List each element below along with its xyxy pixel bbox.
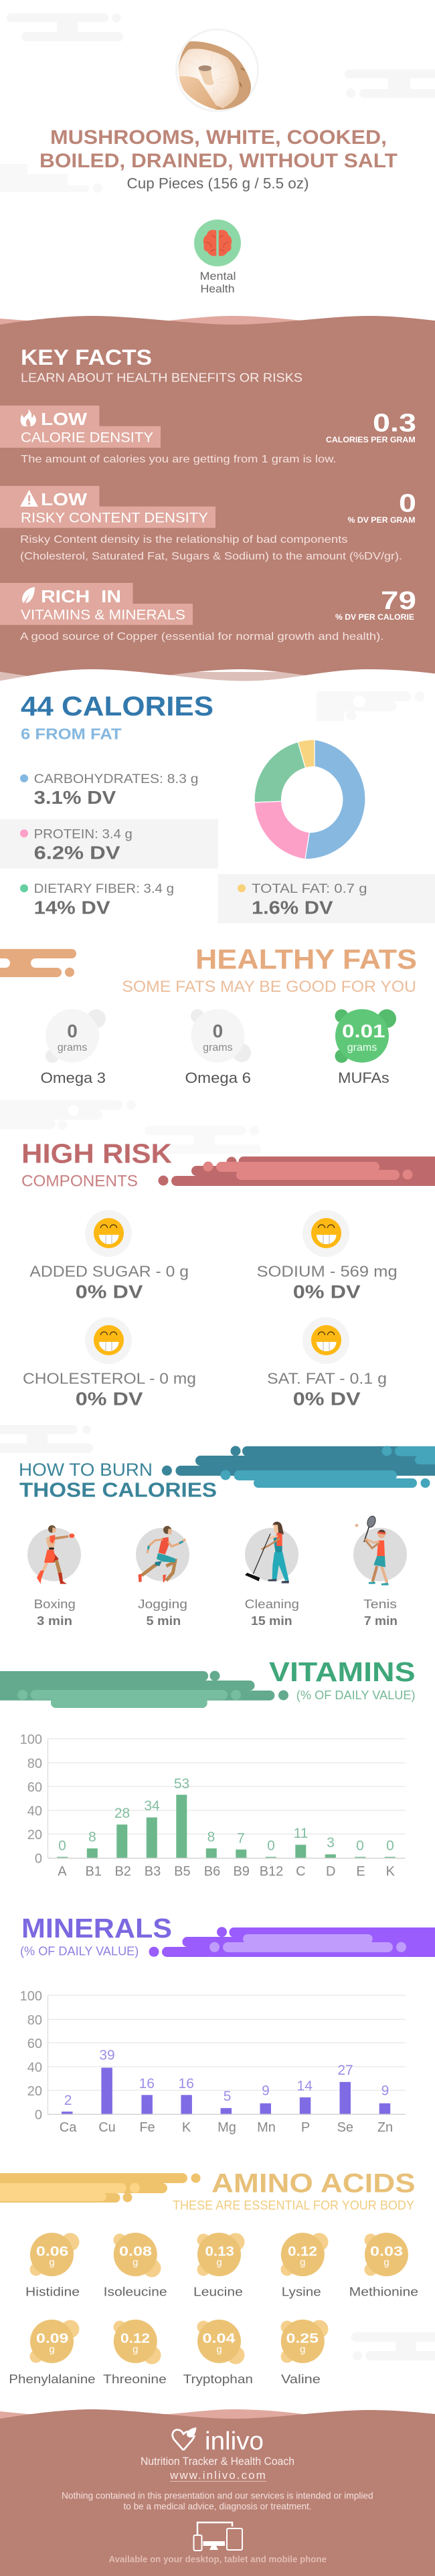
icon: devices [194, 2522, 242, 2551]
fact: low calorie density: The amount of calories you are getting from 1 gram is low. [21, 454, 336, 465]
bar chart: vitamins: 0 [35, 1851, 42, 1866]
label: mental health [199, 270, 236, 295]
bar chart: minerals: 100 [20, 1989, 42, 2004]
item: sodium [257, 1210, 398, 1302]
amino: methionine [349, 2233, 418, 2299]
amino: isoleucine: 0.08 [119, 2244, 152, 2259]
bar chart: minerals: 16 [179, 2076, 194, 2091]
bar chart: vitamins: 3 [327, 1835, 335, 1851]
amino: isoleucine: g [133, 2257, 138, 2268]
amino: threonine: g [133, 2344, 138, 2355]
fat: omega 3: Omega 3 [40, 1069, 106, 1086]
heading: how to burn: HOW TO BURN [19, 1460, 153, 1480]
panel: minerals [20, 1913, 435, 2135]
bar chart: vitamins: 20 [27, 1828, 42, 1842]
panel: key facts [0, 316, 435, 681]
row: dietary fiber [20, 881, 174, 918]
heading: minerals: MINERALS [21, 1913, 172, 1944]
bar chart: vitamins: 0 [356, 1838, 364, 1854]
item: added sugar [29, 1210, 189, 1302]
bar chart: vitamins: B3 [145, 1865, 161, 1879]
fact: rich in vitamins and minerals: RICH IN [41, 586, 121, 606]
item: saturated fat: SAT. FAT - 0.1 g [267, 1370, 387, 1387]
decorative banner: vitamins [0, 1670, 288, 1708]
bar chart: vitamins: 7 [237, 1831, 245, 1846]
fact: rich in vitamins and minerals [0, 583, 416, 642]
fat: omega 3: grams [58, 1042, 87, 1053]
item: cholesterol [23, 1317, 196, 1409]
fact: low risky content density: RISKY CONTENT DENSITY [21, 510, 208, 526]
amino: leucine: 0.13 [205, 2244, 234, 2259]
amino: threonine [103, 2320, 167, 2386]
row: total fat [218, 874, 435, 924]
row: carbohydrates: CARBOHYDRATES: 8.3 g [34, 772, 198, 786]
fat: MUFAs: grams [347, 1042, 377, 1053]
icon: brain, mental health [194, 220, 241, 266]
bar chart: minerals: 0 [35, 2108, 42, 2123]
bar chart: vitamins: B5 [174, 1865, 191, 1879]
amino: valine: Valine [281, 2373, 321, 2386]
fact: rich in vitamins and minerals: 79 [381, 587, 416, 615]
heading: amino acids: AMINO ACIDS [211, 2168, 416, 2198]
bar chart: vitamins: 53 [174, 1776, 189, 1792]
heading: key facts: KEY FACTS [21, 345, 152, 369]
amino: lysine [281, 2233, 328, 2299]
bar chart: vitamins: B1 [85, 1865, 102, 1879]
decorative banner: burn [162, 1446, 435, 1488]
fat: omega 3 [40, 1009, 106, 1086]
amino: tryptophan: Tryptophan [183, 2373, 253, 2386]
activity: boxing: 3 min [37, 1614, 72, 1628]
bar chart: vitamins: 11 [294, 1826, 308, 1841]
donut chart: calories [254, 740, 365, 859]
bar chart: vitamins: B9 [233, 1865, 250, 1879]
fact: low calorie density: CALORIE DENSITY [21, 430, 153, 446]
food image: mushroom [177, 29, 258, 111]
activity: jogging: 5 min [146, 1614, 181, 1628]
fact: rich in vitamins and minerals: % DV PER CALORIE [335, 612, 414, 622]
decorative cloud: top right [345, 70, 435, 98]
fact: low calorie density [0, 406, 416, 465]
fact: low calorie density: 0.3 [373, 409, 416, 437]
bar chart: vitamins: B12 [260, 1865, 283, 1879]
bar chart: minerals: 14 [297, 2078, 313, 2093]
decorative cloud: left of title [0, 164, 102, 193]
activity: cleaning: 15 min [251, 1614, 292, 1628]
activity: cleaning: Cleaning [245, 1598, 299, 1611]
bar chart: vitamins: 40 [27, 1804, 42, 1819]
footer availability note: Available on your desktop, tablet and mobile phone [108, 2554, 327, 2565]
activity: tennis [353, 1515, 407, 1628]
amino: histidine: 0.06 [36, 2244, 68, 2259]
bar chart: vitamins [20, 1732, 406, 1879]
amino: methionine: 0.03 [370, 2244, 403, 2259]
amino: valine: g [300, 2344, 305, 2355]
title: BOILED, DRAINED, WITHOUT SALT [39, 150, 398, 172]
row: protein: 6.2% DV [34, 842, 120, 863]
fact: low risky content density [0, 486, 416, 562]
subheading: percent of daily value: (% OF DAILY VALUE) [20, 1944, 139, 1958]
label: mental health: Mental [199, 270, 236, 282]
fat: omega 6: grams [203, 1042, 233, 1053]
fat: omega 6 [185, 1009, 251, 1086]
decorative banner: amino acids [0, 2173, 201, 2203]
decorative cloud: top left [7, 13, 123, 41]
decorative cloud: amino acids right [351, 2332, 435, 2360]
amino: tryptophan: g [216, 2344, 222, 2355]
amino: histidine [25, 2233, 80, 2299]
amino: tryptophan: 0.04 [202, 2331, 236, 2346]
amino: threonine: 0.12 [120, 2331, 150, 2346]
bar chart: vitamins: B6 [204, 1865, 220, 1879]
heading: calories: 44 CALORIES [21, 691, 213, 721]
subheading: percent of daily value: (% OF DAILY VALUE) [296, 1688, 416, 1702]
fact: low calorie density: LOW [41, 409, 88, 429]
amino: lysine: Lysine [282, 2286, 321, 2299]
bar chart: minerals: 27 [337, 2063, 353, 2078]
activity: boxing [27, 1525, 81, 1628]
label: mental health: Health [201, 282, 234, 295]
decorative banner: minerals [149, 1927, 435, 1957]
amino: leucine [193, 2233, 245, 2299]
panel: footer [0, 2409, 435, 2576]
row: dietary fiber: DIETARY FIBER: 3.4 g [34, 881, 174, 896]
activity: cleaning [245, 1522, 299, 1628]
footer tagline: Nutrition Tracker & Health Coach [141, 2455, 294, 2468]
amino: phenylalanine [9, 2320, 96, 2386]
amino: lysine: 0.12 [288, 2244, 317, 2259]
heading: those calories: THOSE CALORIES [19, 1479, 217, 1502]
item: cholesterol: CHOLESTEROL - 0 mg [23, 1370, 196, 1387]
row: total fat: 1.6% DV [252, 897, 333, 918]
bar chart: vitamins: A [58, 1865, 67, 1879]
heading: high risk: HIGH RISK [21, 1138, 172, 1169]
subheading: components: COMPONENTS [21, 1172, 138, 1190]
panel: healthy fats [0, 944, 417, 1086]
fact: low risky content density: LOW [41, 489, 88, 509]
footer disclaimer: to be a medical advice, diagnosis or treatment. [123, 2500, 312, 2511]
bar chart: minerals: 60 [27, 2037, 42, 2051]
bar chart: minerals: Cu [98, 2120, 116, 2135]
amino: histidine: Histidine [25, 2286, 80, 2299]
bar chart: minerals: Mn [257, 2120, 276, 2135]
item: added sugar: ADDED SUGAR - 0 g [29, 1263, 189, 1280]
decorative banner: high risk [158, 1156, 435, 1186]
fact: low calorie density: CALORIES PER GRAM [326, 435, 416, 444]
bar chart: minerals: 2 [64, 2093, 72, 2108]
footer url: www.inlivo.com [169, 2469, 266, 2482]
title [39, 126, 398, 172]
amino: leucine: g [216, 2257, 222, 2268]
amino: isoleucine [104, 2233, 167, 2299]
row: total fat: TOTAL FAT: 0.7 g [252, 881, 367, 896]
bar chart: vitamins: 28 [114, 1806, 130, 1821]
subheading: calories from fat: 6 FROM FAT [21, 725, 122, 742]
bar chart: minerals: Fe [139, 2120, 155, 2135]
decorative banner: healthy fats [0, 949, 76, 977]
fact: rich in vitamins and minerals: A good source of Copper (essential for normal growth and health). [20, 631, 384, 642]
bar chart: vitamins: E [356, 1865, 365, 1879]
bar chart: minerals: 9 [262, 2083, 270, 2099]
activity: boxing: Boxing [34, 1598, 76, 1611]
amino: leucine: Leucine [193, 2286, 243, 2299]
fat: omega 6: Omega 6 [185, 1069, 251, 1086]
subheading: key facts: LEARN ABOUT HEALTH BENEFITS OR RISKS [21, 371, 302, 384]
item: sodium: SODIUM - 569 mg [257, 1263, 398, 1280]
row: dietary fiber: 14% DV [34, 897, 110, 918]
bar chart: minerals [20, 1989, 406, 2135]
bar chart: vitamins: 0 [58, 1838, 66, 1854]
amino: methionine: g [383, 2257, 389, 2268]
bar chart: minerals: 80 [27, 2013, 42, 2028]
logo: inlivo: inlivo [205, 2427, 264, 2456]
fat: MUFAs [335, 1009, 396, 1086]
activity: jogging [136, 1526, 189, 1628]
amino: isoleucine: Isoleucine [104, 2286, 167, 2299]
decorative cloud: calories [317, 691, 424, 721]
footer disclaimer [62, 2490, 373, 2511]
bar chart: vitamins: D [326, 1865, 335, 1879]
row: carbohydrates: 3.1% DV [34, 787, 116, 808]
bar chart: vitamins: C [296, 1865, 306, 1879]
bar chart: vitamins: 0 [267, 1838, 275, 1854]
amino: lysine: g [300, 2257, 305, 2268]
fact: low risky content density: % DV PER GRAM [348, 515, 415, 525]
bar chart: minerals: Mg [217, 2120, 236, 2135]
serving size: Cup Pieces (156 g / 5.5 oz) [127, 175, 309, 191]
subheading: healthy fats: SOME FATS MAY BE GOOD FOR YOU [122, 978, 416, 996]
amino: phenylalanine: Phenylalanine [9, 2373, 96, 2386]
bar chart: minerals: Se [337, 2120, 353, 2135]
decorative cloud: above high risk left [0, 1100, 136, 1130]
amino: valine [281, 2320, 328, 2386]
title: MUSHROOMS, WHITE, COOKED, [50, 126, 387, 149]
heading: healthy fats: HEALTHY FATS [195, 944, 417, 975]
bar chart: vitamins: 80 [27, 1756, 42, 1771]
bar chart: vitamins: B2 [114, 1865, 131, 1879]
amino: phenylalanine: 0.09 [36, 2331, 68, 2346]
bar chart: minerals: Zn [377, 2120, 393, 2135]
item: added sugar: 0% DV [76, 1281, 143, 1302]
amino: threonine: Threonine [103, 2373, 167, 2386]
bar chart: minerals: P [301, 2120, 310, 2135]
fat: omega 3: 0 [67, 1021, 78, 1041]
bar chart: minerals: Ca [60, 2120, 77, 2135]
item: sodium: 0% DV [293, 1281, 361, 1302]
item: saturated fat [267, 1317, 387, 1409]
heading: vitamins: VITAMINS [269, 1656, 416, 1687]
bar chart: minerals: 40 [27, 2060, 42, 2075]
bar chart: vitamins: 34 [144, 1798, 160, 1814]
bar chart: vitamins: 60 [27, 1780, 42, 1795]
row: carbohydrates [20, 772, 198, 808]
footer disclaimer: Nothing contained in this presentation and our services is intended or implied [62, 2490, 373, 2500]
bar chart: vitamins: 8 [88, 1830, 96, 1844]
activity: jogging: Jogging [138, 1598, 187, 1611]
fat: MUFAs: 0.01 [342, 1021, 385, 1041]
amino: valine: 0.25 [286, 2331, 319, 2346]
bar chart: minerals: 39 [99, 2048, 115, 2063]
fat: MUFAs: MUFAs [338, 1069, 389, 1086]
bar chart: minerals: 16 [139, 2076, 155, 2091]
panel: how to burn those calories [19, 1446, 435, 1628]
fact: low risky content density: Risky Content density is the relationship of bad components [20, 534, 348, 545]
amino: histidine: g [49, 2257, 55, 2268]
bar chart: minerals: K [182, 2120, 191, 2135]
bar chart: vitamins: 100 [20, 1732, 42, 1747]
bar chart: minerals: 5 [224, 2089, 231, 2104]
item: cholesterol: 0% DV [76, 1388, 143, 1409]
fact: low risky content density: 0 [399, 489, 416, 517]
fat: omega 6: 0 [213, 1021, 223, 1041]
item: saturated fat: 0% DV [293, 1388, 361, 1409]
bar chart: vitamins: K [386, 1865, 396, 1879]
logo: inlivo [173, 2427, 264, 2456]
panel: high risk components [21, 1138, 435, 1409]
bar chart: vitamins: 8 [207, 1830, 215, 1844]
row: protein [0, 819, 218, 869]
fact: low risky content density: (Cholesterol, Saturated Fat, Sugars & Sodium) to the amount (%DV/gr). [20, 551, 402, 562]
decorative cloud: above burn [0, 1425, 93, 1453]
bar chart: minerals: 9 [381, 2083, 389, 2099]
bar chart: minerals: 20 [27, 2084, 42, 2099]
amino: phenylalanine: g [49, 2344, 55, 2355]
fact: rich in vitamins and minerals: VITAMINS & MINERALS [21, 606, 185, 622]
panel: vitamins [0, 1656, 416, 1879]
bar chart: vitamins: 0 [386, 1838, 394, 1854]
activity: tennis: 7 min [364, 1614, 398, 1628]
row: protein: PROTEIN: 3.4 g [34, 827, 133, 841]
amino: tryptophan [183, 2320, 253, 2386]
panel: amino acids [0, 2168, 418, 2386]
subheading: amino acids: THESE ARE ESSENTIAL FOR YOUR BODY [173, 2198, 414, 2213]
amino: methionine: Methionine [349, 2286, 418, 2299]
panel: calories [0, 691, 435, 924]
decorative cloud: above high risk centre [145, 1126, 261, 1154]
activity: tennis: Tenis [363, 1598, 397, 1611]
